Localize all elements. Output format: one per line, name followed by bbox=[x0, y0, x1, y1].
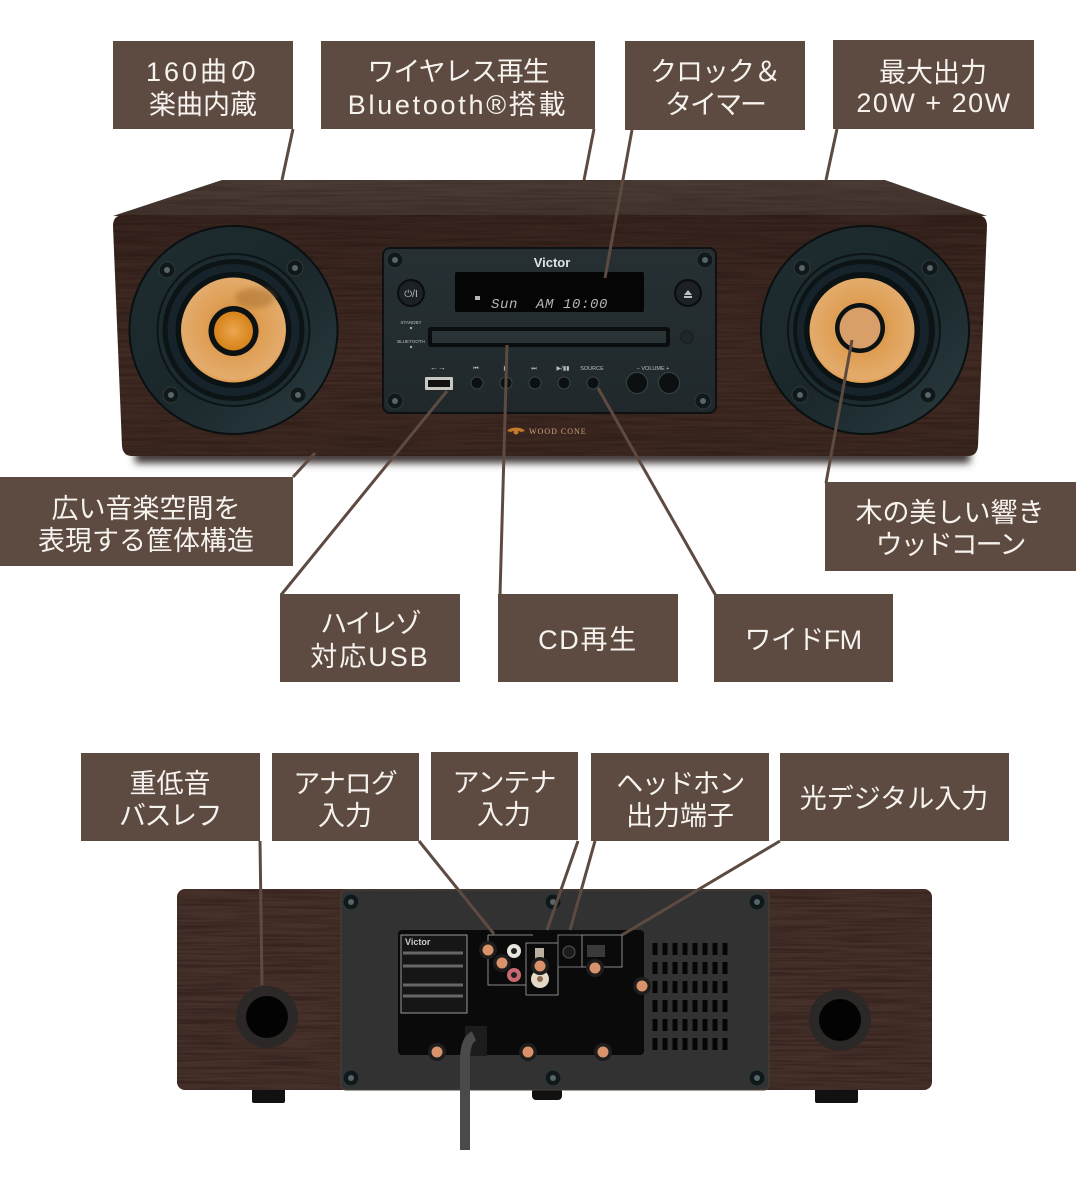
feet bbox=[252, 1088, 858, 1103]
callout: headphone bbox=[591, 753, 769, 841]
leader lines: rear bbox=[260, 841, 780, 985]
black connector area bbox=[398, 930, 644, 1055]
left bass port bbox=[236, 986, 298, 1048]
rating label bbox=[401, 935, 467, 1013]
button labels: ▶/▮▮ bbox=[557, 366, 569, 372]
callout: analog input bbox=[272, 753, 419, 841]
usb port: ←→ bbox=[430, 363, 446, 372]
callout: optical input: 光デジタル入力 bbox=[800, 784, 988, 814]
leader lines: front bbox=[281, 129, 852, 596]
cabinet front bbox=[113, 215, 987, 456]
standby labels: BLUETOOTH bbox=[397, 339, 425, 344]
callout: bluetooth: ワイヤレス再生 bbox=[367, 57, 549, 87]
callout: output: 最大出力 bbox=[879, 58, 987, 88]
power button: ⏻/I bbox=[404, 289, 418, 300]
callout: clock: クロック＆ bbox=[650, 57, 780, 87]
right speaker bbox=[760, 225, 970, 435]
callout: 160 songs: 160曲の bbox=[146, 57, 260, 87]
panel: front view of stereo bbox=[113, 180, 987, 463]
callout: cabinet: 広い音楽空間を bbox=[52, 494, 240, 524]
brand logo: Victor bbox=[534, 255, 570, 270]
phones jack bbox=[558, 935, 582, 967]
callout: optical input bbox=[780, 753, 1009, 841]
rear cabinet bbox=[177, 889, 932, 1090]
callout: output bbox=[833, 40, 1034, 129]
callout: headphone: ヘッドホン bbox=[616, 769, 744, 799]
callout: hi-res usb: 対応USB bbox=[310, 642, 430, 672]
callout: bass reflex: バスレフ bbox=[119, 801, 221, 831]
callout: bluetooth: Bluetooth®搭載 bbox=[348, 90, 568, 120]
disc slot bbox=[428, 327, 670, 347]
callout: antenna input bbox=[431, 752, 578, 840]
callout: 160 songs: 楽曲内蔵 bbox=[149, 90, 257, 120]
callout: wood cone: ウッドコーン bbox=[876, 530, 1024, 560]
eject button bbox=[675, 280, 701, 306]
panel: rear view of stereo bbox=[177, 889, 932, 1150]
callout: bass reflex: 重低音 bbox=[130, 769, 210, 799]
button labels bbox=[473, 366, 669, 372]
callout: hi-res usb: ハイレゾ bbox=[320, 609, 421, 639]
power button bbox=[398, 280, 424, 306]
callout: antenna input: 入力 bbox=[477, 800, 531, 830]
standby labels bbox=[397, 320, 425, 348]
callout: wide fm bbox=[714, 594, 893, 682]
callout: cabinet: 表現する筐体構造 bbox=[38, 526, 254, 556]
callout: clock bbox=[625, 41, 805, 130]
callout: bass reflex bbox=[81, 753, 260, 841]
power cord bbox=[465, 1026, 487, 1150]
button labels: ▮ bbox=[503, 366, 507, 372]
button labels: SOURCE bbox=[580, 366, 604, 372]
callout: wood cone: 木の美しい響き bbox=[856, 498, 1044, 528]
callout: cd bbox=[498, 594, 678, 682]
transport buttons bbox=[471, 372, 680, 394]
callout: cabinet bbox=[0, 477, 293, 566]
rear metal panel bbox=[341, 890, 769, 1150]
sensor bbox=[681, 331, 693, 343]
callout: antenna input: アンテナ bbox=[453, 768, 555, 798]
callout: clock: タイマー bbox=[665, 90, 765, 120]
callout: wood cone bbox=[825, 482, 1076, 571]
standby labels: STANDBY bbox=[401, 320, 421, 325]
antenna jack bbox=[526, 943, 558, 995]
button labels: ⏭ bbox=[531, 366, 537, 372]
callout: cd: CD再生 bbox=[538, 625, 638, 655]
vents bbox=[655, 943, 725, 1050]
callout: analog input: アナログ bbox=[293, 769, 397, 799]
optical jack bbox=[582, 935, 622, 967]
callout: analog input: 入力 bbox=[318, 801, 372, 831]
left speaker bbox=[128, 225, 338, 435]
rating label: Victor bbox=[405, 937, 431, 947]
stereo shadow bbox=[135, 450, 970, 463]
control panel bbox=[383, 248, 716, 413]
callout: headphone: 出力端子 bbox=[626, 801, 734, 831]
usb port bbox=[425, 363, 453, 390]
wood cone logo: WOOD CONE bbox=[529, 427, 587, 436]
copper screws bbox=[428, 941, 651, 1061]
callout: 160 songs bbox=[113, 41, 293, 129]
button labels: − VOLUME + bbox=[637, 366, 669, 372]
callout: wide fm: ワイドFM bbox=[745, 625, 861, 655]
callout: output: 20W + 20W bbox=[856, 88, 1012, 118]
display: Sun AM 10:00 bbox=[491, 297, 608, 313]
rca jacks bbox=[488, 935, 533, 985]
callout: bluetooth bbox=[321, 41, 595, 129]
display bbox=[455, 272, 644, 313]
cabinet top bbox=[113, 180, 987, 216]
callout: hi-res usb bbox=[280, 594, 460, 682]
button labels: ⏮ bbox=[473, 366, 479, 372]
right bass port bbox=[809, 989, 871, 1051]
